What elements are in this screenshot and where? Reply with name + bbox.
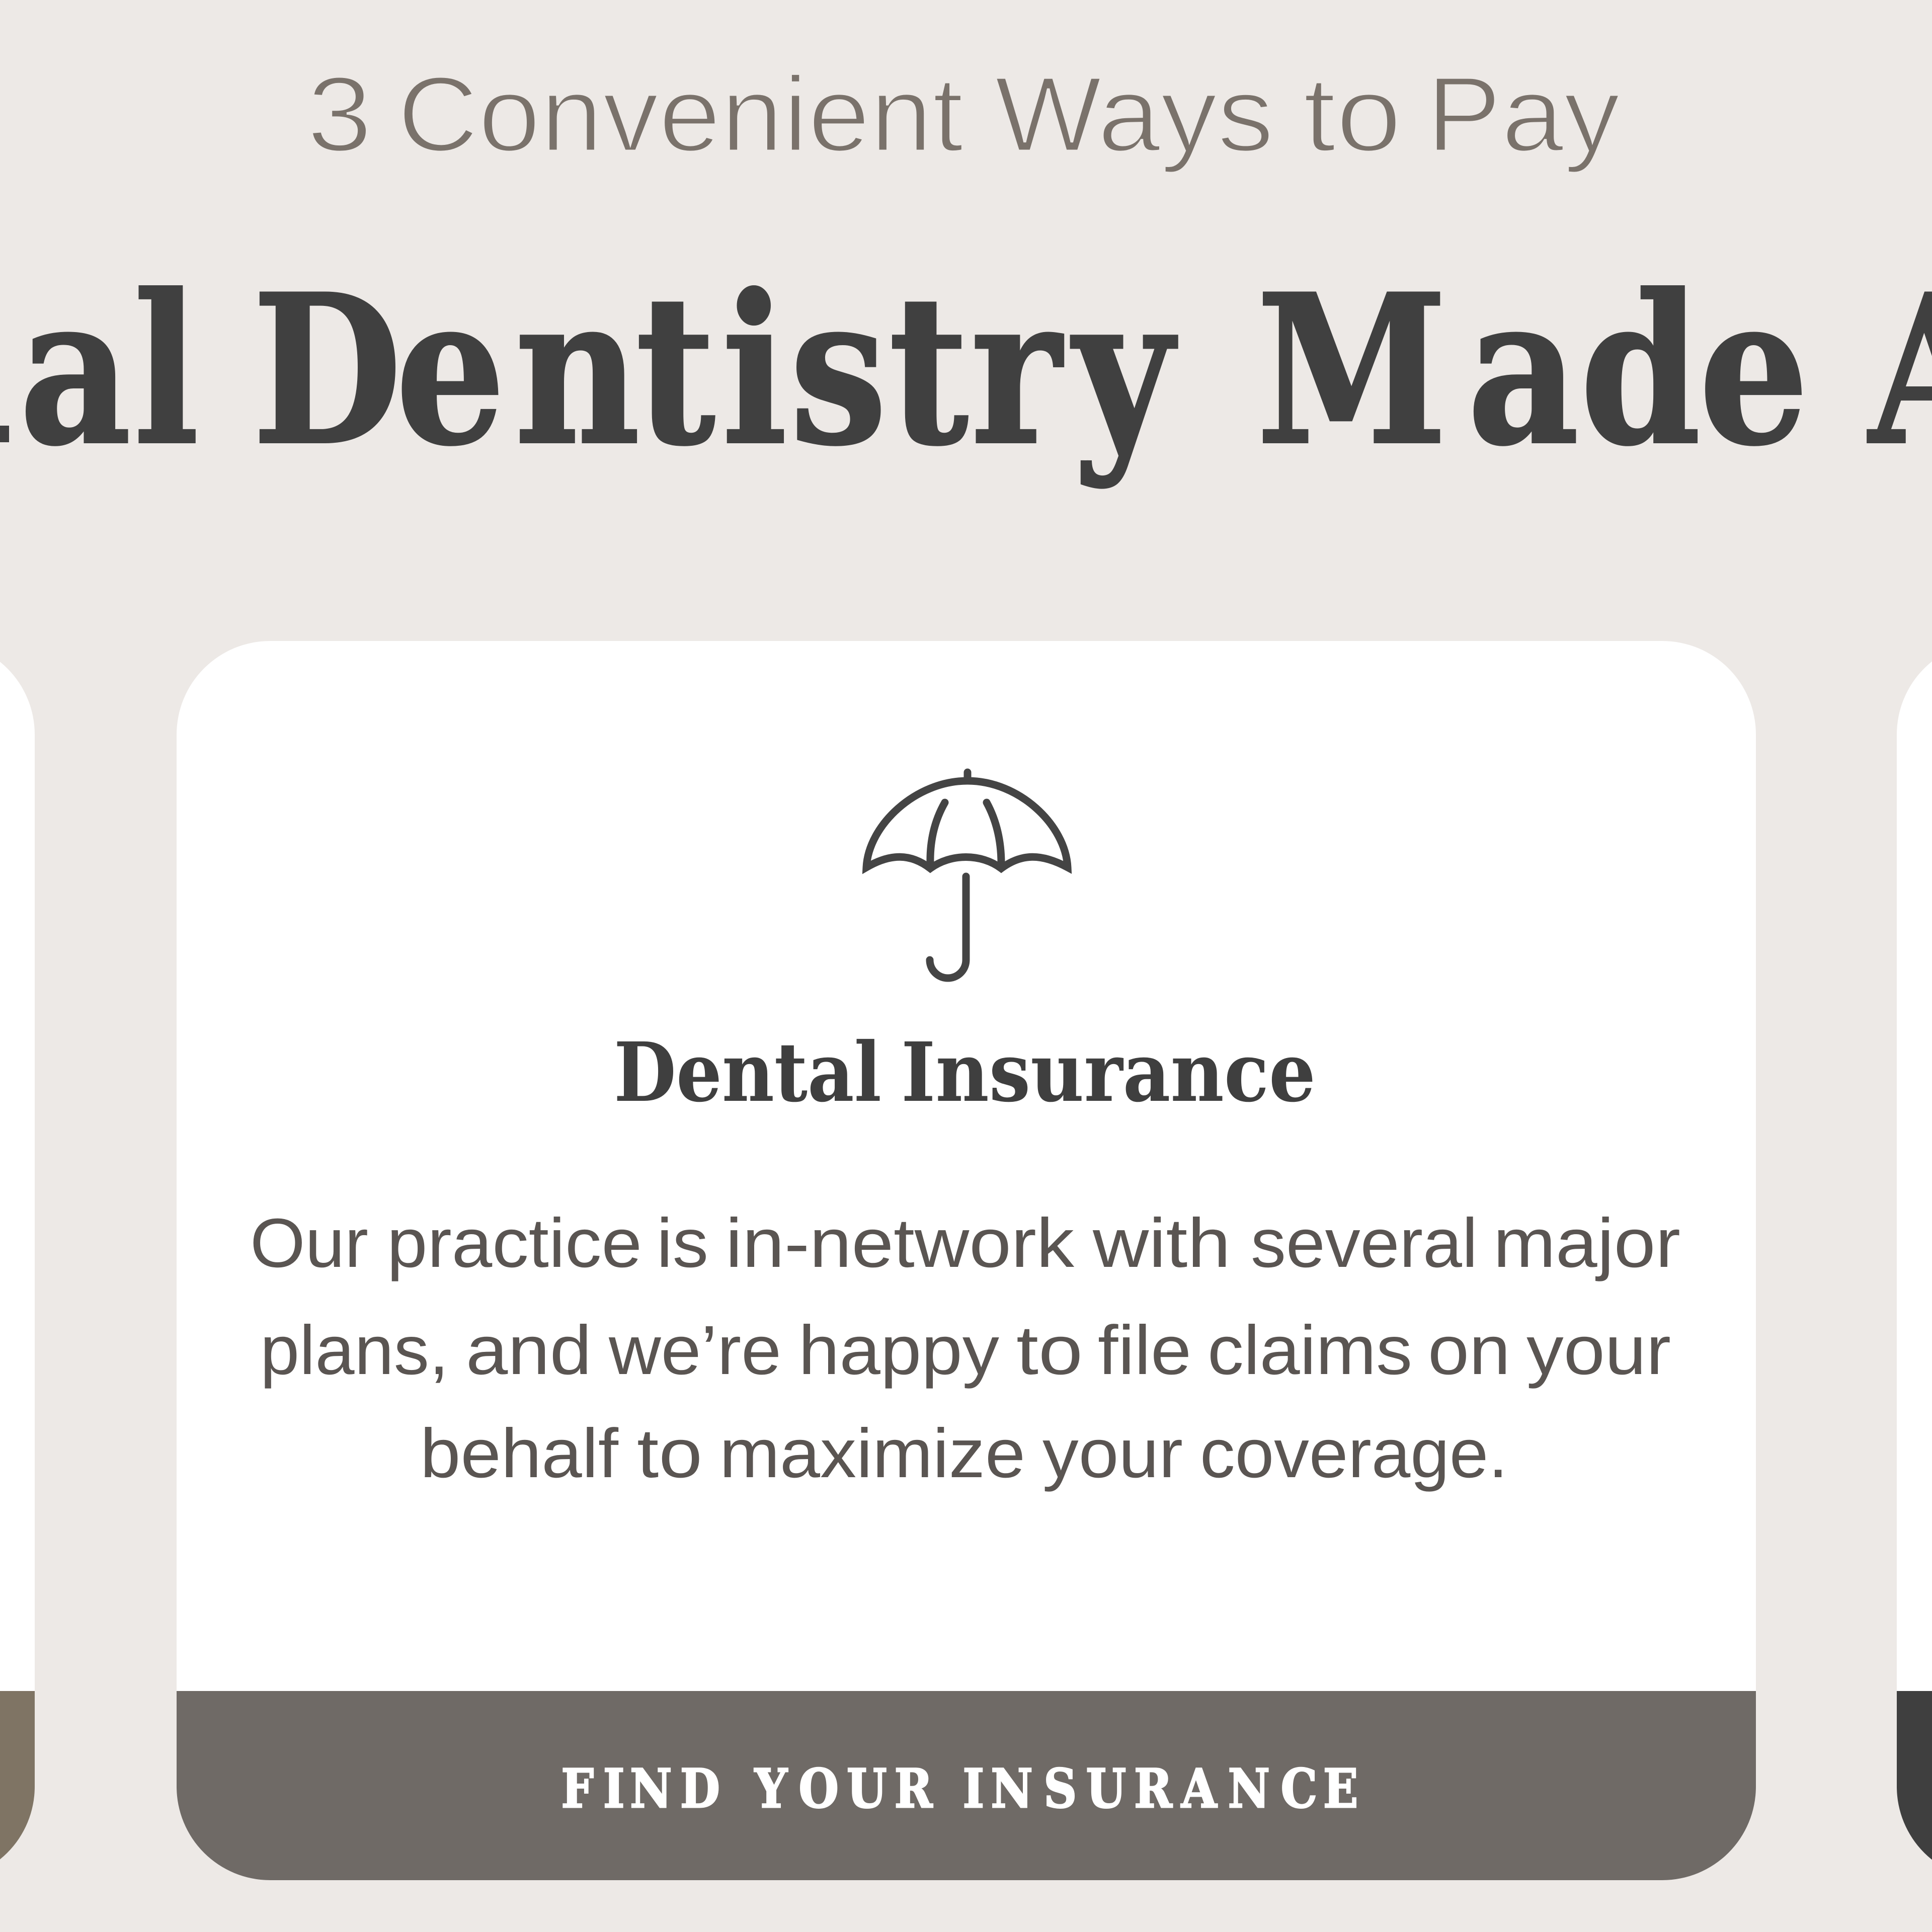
panel: left card (cropped) <box>0 641 35 1880</box>
card body text: with <box>1092 1204 1231 1282</box>
card body text: plans, <box>260 1312 449 1389</box>
card heading <box>614 1025 1316 1120</box>
subtitle <box>307 54 1620 174</box>
card body text: coverage. <box>1200 1415 1508 1492</box>
subtitle: Convenient <box>397 54 963 174</box>
card body text: several <box>1251 1204 1478 1282</box>
card body text: file <box>1098 1312 1191 1389</box>
card body text: Our <box>250 1204 368 1282</box>
card body text <box>250 1204 1680 1492</box>
card body text: we’re <box>608 1312 781 1389</box>
card body text: to <box>1016 1312 1083 1389</box>
card footer button: FIND YOUR INSURANCE <box>561 1757 1358 1820</box>
card body text: is <box>657 1204 708 1282</box>
card body text: and <box>466 1312 592 1389</box>
card body text: on <box>1428 1312 1510 1389</box>
card body text: your <box>1526 1312 1671 1389</box>
subtitle: Ways <box>995 54 1274 174</box>
panel: dental insurance card <box>177 641 1756 1880</box>
card heading: Insurance <box>901 1025 1316 1120</box>
card body text: happy <box>798 1312 999 1389</box>
card body text: to <box>637 1415 702 1492</box>
card body text: claims <box>1208 1312 1412 1389</box>
card heading: Dental <box>614 1025 881 1120</box>
card body text: maximize <box>719 1415 1025 1492</box>
subtitle: 3 <box>307 54 372 174</box>
subtitle: to <box>1303 54 1402 174</box>
card body text: practice <box>387 1204 642 1282</box>
card body <box>177 641 1756 1880</box>
card body text: behalf <box>420 1415 619 1492</box>
panel: right card (cropped) <box>1897 641 1932 1880</box>
card body text: your <box>1042 1415 1183 1492</box>
card body text: in-network <box>726 1204 1075 1282</box>
subtitle: Pay <box>1426 54 1620 174</box>
card footer button <box>177 1691 1756 1880</box>
icon: umbrella <box>866 772 1068 978</box>
card body text: major <box>1493 1204 1680 1282</box>
